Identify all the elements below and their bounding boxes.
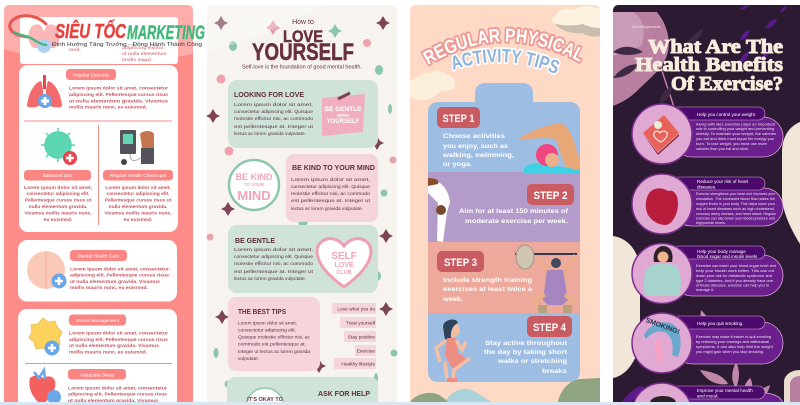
benefit: mental health <box>633 383 783 405</box>
card: faded top card <box>20 17 178 64</box>
label: mental health care: Mental Health Care <box>78 254 119 260</box>
step 4: Stay active throughout <box>485 340 567 347</box>
benefit: heart disease: Reduce your risk of heart <box>697 179 749 184</box>
list: tip tags: Stay positive <box>348 334 375 340</box>
benefit: heart disease: diseases. <box>697 184 716 190</box>
card: regular exercise and checkups <box>19 65 178 232</box>
text: best tips body <box>238 320 311 361</box>
badge: self love club heart: SELF <box>331 251 357 262</box>
text: be gentle body: molestie efficitur nisi, ac commodo <box>234 261 314 266</box>
benefit: quit smoking: by reducing your cravings and withdrawal <box>696 340 769 344</box>
text: health check-ups body <box>104 185 172 223</box>
text: looking for love body: consectetur adipiscing elit. Quisque <box>234 109 314 114</box>
text: balanced diet body <box>24 185 93 223</box>
benefit: quit smoking <box>632 313 783 373</box>
text: be kind body: est pellentesque at. Integer ut <box>291 198 371 203</box>
list: tip tags <box>332 303 376 369</box>
step 4 <box>436 316 572 382</box>
title: love yourself: YOURSELF <box>252 39 354 66</box>
benefit: mental health: Improve your mental health <box>697 388 753 393</box>
text: mental health body <box>70 266 169 291</box>
benefit: heart disease: oxygen levels in your body. This helps lower your <box>696 202 776 206</box>
icon: sticky note: BE GENTLE <box>324 106 362 113</box>
overlay: watermark haze <box>0 0 330 62</box>
text: handle: @reallygreatsite <box>632 24 662 29</box>
title: love yourself: LOVE <box>283 27 323 46</box>
badge: be kind to your mind: MIND <box>237 188 271 203</box>
text: sleep body <box>68 386 167 404</box>
benefit: quit smoking: Help you quit smoking. <box>697 321 743 326</box>
card: ask for help <box>227 377 378 405</box>
benefit: heart disease: exercise can also lower your blood pressure and <box>696 216 775 220</box>
icon: quit smoking: SMOKING! <box>645 317 681 336</box>
text: sleep body: ut nulla elementum gravida. Vivamus <box>68 398 158 404</box>
step 2: Aim for at least 150 minutes of <box>459 208 569 215</box>
panel: wellness card list <box>4 5 193 405</box>
text: stress body: mollis mauris nunc, eu euismod. <box>69 350 148 356</box>
heading: looking for love: LOOKING FOR LOVE <box>234 90 304 99</box>
logo: sieu toc marketing watermark: Định Hướng Tăng Trưởng - Đồng Hành Thành Công <box>52 41 202 48</box>
text: be kind body <box>291 177 371 211</box>
icon: heart organ <box>29 370 61 405</box>
benefit: control weight: Along with diet, exercise plays an important <box>696 122 775 126</box>
text: health check-ups body: eu euismod. <box>124 217 153 223</box>
text: mental health body: Lorem ipsum dolor sit amet, consectetur <box>70 266 169 272</box>
badge: be kind to your mind: TO YOUR <box>244 182 265 187</box>
benefit: blood sugar: type 2 diabetes. And if you already have one <box>696 279 773 283</box>
text: be kind body: consectetur adipiscing elit. Quisque <box>291 184 371 189</box>
icon: heart <box>646 188 678 225</box>
icon: swoosh <box>10 16 46 45</box>
logo: sieu toc marketing watermark: SIÊU TỐC <box>55 19 126 43</box>
step 1: walking, swimming, <box>442 152 514 159</box>
badge: self love club heart: LOVE <box>334 262 354 269</box>
label: regular exercise: Regular Exercise <box>73 72 110 78</box>
text: health check-ups body: Lorem ipsum dolor sit amet, <box>105 185 171 191</box>
text: be gentle body <box>234 247 314 281</box>
label: adequate sleep: Adequate Sleep <box>80 372 114 378</box>
text: regular exercise body <box>69 86 168 110</box>
decorations: sparkles and flowers <box>206 16 398 388</box>
text: regular exercise body: ut nulla elementum gravida. Vivamus <box>69 98 168 104</box>
label: regular exercise <box>66 69 116 80</box>
icon: brain <box>27 251 66 289</box>
badge: be kind to your mind <box>229 160 279 210</box>
step 3: week. <box>442 296 463 303</box>
text: best tips body: consectetur adipiscing elit. <box>238 328 296 332</box>
icon: runner <box>436 320 470 382</box>
text: mental health body: adipiscing elit. Pellentesque cursus risus <box>70 272 169 278</box>
text: stress body <box>69 330 168 356</box>
list: tip tags: Love what you do <box>337 306 375 312</box>
title: what are the health benefits <box>635 36 783 95</box>
step 2: moderate exercise per week. <box>465 218 568 225</box>
text: health check-ups body: Vivamus mollis mauris nunc, <box>104 210 172 216</box>
label: stress management: Stress Management <box>76 318 120 324</box>
benefit: quit smoking: Exercise may make it easier to quit smoking <box>696 335 771 339</box>
title: what are the health benefits: Of Exercise? <box>671 73 783 95</box>
card: mental health care <box>18 240 177 302</box>
card: faded top card: mod. <box>69 47 81 53</box>
step 2: STEP 2 <box>534 190 568 202</box>
text: mental health body: mollis mauris nunc, eu euismod. <box>70 285 149 291</box>
benefit: blood sugar <box>632 244 783 304</box>
text: be gentle body: lectus ac lorem gravida vulputate. <box>234 276 306 281</box>
benefit: heart disease: risk of heart diseases such as high cholesterol, <box>696 207 775 211</box>
step 4: the day by taking short <box>484 349 567 356</box>
step 3: exercises at least twice a <box>443 286 533 293</box>
badge: self love club heart: CLUB <box>336 270 352 276</box>
text: be gentle body: est pellentesque at. Integer ut <box>234 269 314 274</box>
label: adequate sleep <box>68 369 126 380</box>
text: best tips body: vulputate. <box>238 356 259 361</box>
title: what are the health benefits: Health Benefits <box>635 54 783 76</box>
decorations: blobs, leaves and drops <box>613 5 800 403</box>
text: mental health body: ut nulla elementum gravida. Vivamus <box>70 279 160 285</box>
benefit: blood sugar: manage it. <box>696 288 714 292</box>
benefit: heart disease: coronary artery disease, and heart attack. Regular <box>696 212 777 216</box>
text: regular exercise body: mollis mauris nunc, eu euismod. <box>69 104 148 110</box>
label: regular health check-ups <box>103 170 173 180</box>
benefit: heart disease: triglyceride levels. <box>696 221 726 225</box>
text: stress body: adipiscing elit. Pellentesque cursus risus <box>69 337 168 343</box>
heading: best tips: THE BEST TIPS <box>238 307 286 316</box>
benefit: heart disease: Exercise strengthens your heart and improves your <box>696 192 776 196</box>
step 1 <box>437 107 580 173</box>
step 4: breaks <box>542 368 568 375</box>
icon: sticky note <box>322 93 365 136</box>
text: stress body: Lorem ipsum dolor sit amet, consectetur <box>69 330 168 336</box>
panel: regular physical activity tips <box>410 5 600 402</box>
icon: sticky note: YOURSELF <box>327 119 360 125</box>
heading: be kind: BE KIND TO YOUR MIND <box>292 163 375 172</box>
label: balanced diet: Balanced Diet <box>43 173 73 179</box>
card: faded top card: mollis mauri <box>122 57 151 63</box>
text: looking for love body: molestie efficitur nisi, ac commodo <box>234 116 314 121</box>
benefit: control weight: Help you control your weight <box>697 112 756 117</box>
text: be kind body: molestie efficitur nisi, ac commodo <box>291 191 371 196</box>
text: balanced diet body: Lorem ipsum dolor sit amet, <box>24 185 93 191</box>
icon: woman testing blood sugar <box>644 246 681 296</box>
text: be kind body: Lorem ipsum dolor sit amet, <box>291 177 370 182</box>
benefit: blood sugar: of those diseases, exercise can help you to <box>696 284 769 288</box>
icon: clouds <box>410 6 600 100</box>
step 1: Choose activities <box>443 133 506 140</box>
text: health check-ups body: consectetur adipiscing elit. <box>106 191 170 197</box>
card: looking for love <box>228 80 378 148</box>
text: be gentle body: consectetur adipiscing elit. Quisque <box>234 254 314 259</box>
logo: sieu toc marketing watermark <box>10 16 205 48</box>
list: tip tags: Treat yourself <box>346 320 376 326</box>
benefit: heart disease: circulation. The increased blood flow raises the <box>696 197 775 201</box>
badge: self love club heart <box>317 239 371 287</box>
list: tip tags: Healthy lifestyle <box>341 362 375 368</box>
heading: be gentle: BE GENTLE <box>235 236 275 245</box>
title: regular physical activity tips: REGULAR PHYSICAL <box>420 26 582 66</box>
logo: sieu toc marketing watermark: MARKETING <box>127 23 205 44</box>
text: looking for love body: lectus ac lorem gravida vulputate. <box>234 131 306 136</box>
text: health check-ups body: Pellentesque cursus risus ut <box>105 198 172 204</box>
icon: scale <box>643 115 679 155</box>
text: balanced diet body: Vivamus mollis mauris nunc, <box>24 210 92 216</box>
text: balanced diet body: nulla elementum gravida. <box>29 204 88 210</box>
text: health check-ups body: nulla elementum gravida. <box>109 204 168 210</box>
benefit: control weight: burn. To lose weight, you must use more <box>696 142 767 146</box>
step 4: STEP 4 <box>533 322 567 334</box>
label: stress management <box>69 314 126 326</box>
text: balanced diet body: consectetur adipiscing elit. <box>26 191 90 197</box>
title: regular physical activity tips: ACTIVITY TIPS <box>452 47 561 75</box>
text: regular exercise body: Lorem ipsum dolor sit amet, consectetur <box>69 86 168 92</box>
text: stress body: ut nulla elementum gravida. Vivamus <box>69 343 159 349</box>
icon: virus <box>41 128 77 165</box>
label: balanced diet <box>24 170 91 180</box>
icon: quit smoking <box>644 317 681 364</box>
text: subtitle: Self-love is the foundation of good mental health. <box>242 64 362 70</box>
text: looking for love body <box>234 102 314 136</box>
text: sleep body: Lorem ipsum dolor sit amet, consectetur <box>68 386 167 392</box>
title: what are the health benefits: What Are The <box>648 36 783 58</box>
icon: blood pressure monitor <box>120 130 154 165</box>
step 3 <box>437 245 577 313</box>
benefit: heart disease <box>632 174 783 234</box>
step 2 <box>428 178 574 242</box>
text: looking for love body: est pellentesque at. Integer ut <box>234 124 314 129</box>
text: be gentle body: Lorem ipsum dolor sit amet, <box>234 247 313 252</box>
benefit: control weight: role in controlling your weight and preventing <box>696 127 774 131</box>
benefit: blood sugar: blood sugar and insulin levels <box>697 254 758 259</box>
text: best tips body: Integer ut lectus ac lorem gravida <box>238 349 311 354</box>
badge: be kind to your mind: BE KIND <box>235 172 273 182</box>
card: ask for help: ASK FOR HELP <box>318 389 370 398</box>
step 1: STEP 1 <box>442 113 474 125</box>
list: tip tags: Exercise <box>357 348 375 354</box>
title: love yourself <box>252 19 354 66</box>
benefit: quit smoking: you might gain when you stop smoking. <box>696 350 764 354</box>
benefit: control weight: obesity. To maintain your weight, the calories <box>696 132 776 136</box>
label: regular health check-ups: Regular Health Check-ups <box>110 173 167 179</box>
card: stress and sleep <box>18 309 177 405</box>
browser edge strip <box>0 402 800 405</box>
step 4: walks or stretching <box>497 358 567 365</box>
card: ask for help: IT'S OKAY TO <box>247 397 284 403</box>
icon: swimmer <box>518 123 580 173</box>
step 3: Include strength training <box>443 277 532 284</box>
icon: hills at bottom <box>410 378 600 402</box>
benefit: blood sugar: Exercise can lower your blood sugar level and <box>696 264 776 268</box>
text: best tips body: commodo est pellentesque at. <box>238 342 306 346</box>
step 1: or yoga. <box>443 161 472 168</box>
benefit: quit smoking: symptoms. It can also help limit the weight <box>696 345 773 349</box>
title: love yourself: How to <box>292 19 314 26</box>
card: be kind to your mind <box>286 154 378 222</box>
benefit: blood sugar: down your risk for metabolic syndrome and <box>696 274 772 278</box>
text: best tips body: Lorem ipsum dolor sit amet, <box>238 320 297 326</box>
text: be kind body: lectus ac lorem gravida vulputate. <box>291 206 363 211</box>
text: regular exercise body: adipiscing elit. Pellentesque cursus risus <box>69 92 168 98</box>
step 3: STEP 3 <box>444 257 477 269</box>
text: balanced diet body: Pellentesque cursus risus ut <box>25 198 92 204</box>
panel: love yourself <box>206 5 398 405</box>
step 1: you enjoy, such as <box>443 143 509 150</box>
text: balanced diet body: eu euismod. <box>44 217 73 223</box>
benefit: mental health: and mood. <box>697 394 719 398</box>
icon: yellow cell <box>29 318 62 356</box>
card: be gentle <box>228 225 378 293</box>
card: faded top card: adipiscing elisitur <box>122 45 164 51</box>
benefit: control weight: calories than you eat and drink. <box>696 147 749 151</box>
label: mental health care <box>70 250 127 261</box>
benefit: control weight: you eat and drink must equal the energy you <box>696 137 774 141</box>
text: sleep body: adipiscing elit. Pellentesque cursus risus <box>68 392 167 398</box>
icon: weightlifter <box>515 245 577 313</box>
text: best tips body: Quisque molestie efficitur nisi, ac <box>238 334 311 340</box>
panel: health benefits of exercise <box>613 5 800 405</box>
card: faded top card: ut nulla elementum <box>122 51 167 57</box>
benefit: blood sugar: Help your body manage <box>697 249 746 254</box>
icon: lungs <box>27 75 62 108</box>
icon: sticky note: WITH <box>337 113 349 118</box>
card: the best tips <box>228 297 320 371</box>
text: looking for love body: Lorem ipsum dolor sit amet, <box>234 102 313 107</box>
icon: yoga pose <box>428 178 450 242</box>
benefit: control weight <box>632 104 783 164</box>
benefit: blood sugar: help your insulin work better. This can cut <box>696 269 774 273</box>
shapes: step panels <box>428 83 580 382</box>
